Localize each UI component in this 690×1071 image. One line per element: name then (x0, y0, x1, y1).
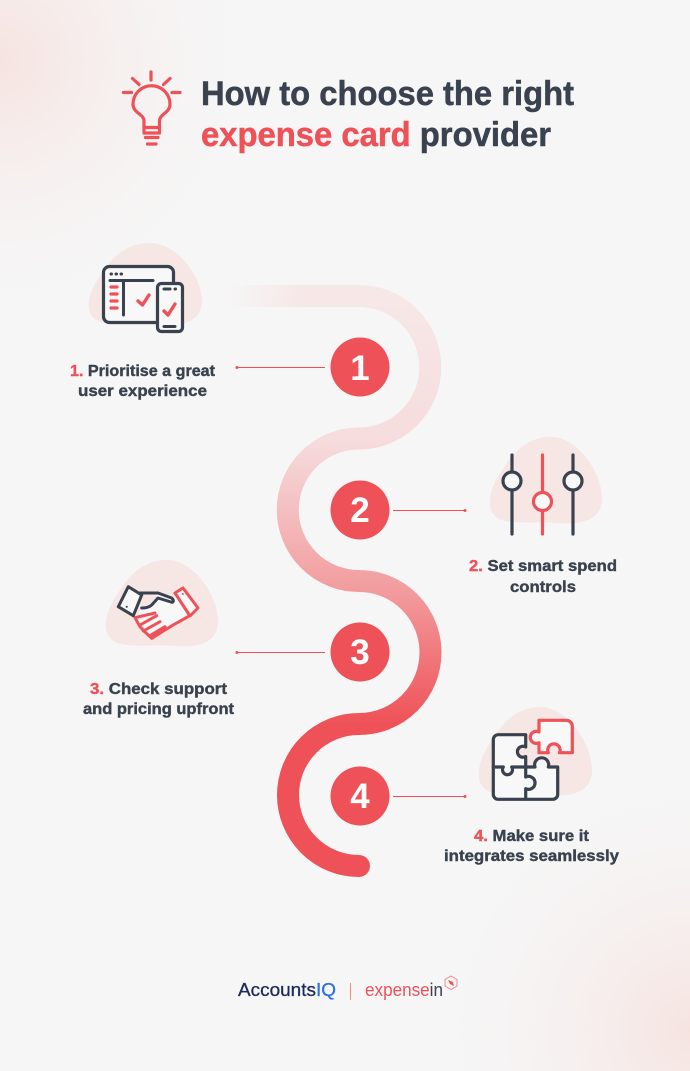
title: expense card provider (201, 116, 551, 154)
label 1 (70, 363, 216, 400)
icon: light bulb (124, 72, 180, 144)
label 4: 4. Make sure it (474, 828, 590, 845)
title (201, 75, 574, 154)
icon: handshake (118, 587, 198, 638)
step 1 marker: 1 (350, 349, 370, 388)
icon: browser and phone (104, 266, 182, 332)
logos: expensein (365, 979, 443, 1000)
icon: sliders (503, 455, 582, 534)
label 3: and pricing upfront (83, 701, 235, 718)
label 1: 1. Prioritise a great (70, 363, 216, 380)
blob 1 (89, 243, 202, 325)
connector 3 (236, 651, 325, 654)
label 3 (83, 681, 235, 718)
step 3 marker: 3 (350, 633, 370, 672)
label 2: 2. Set smart spend (469, 558, 617, 575)
step 4 marker: 4 (350, 777, 370, 816)
blob 4 (479, 707, 592, 795)
step 3 marker (330, 622, 390, 682)
logos: AccountsIQ (238, 980, 336, 1000)
label 2: controls (510, 579, 576, 596)
label 2 (469, 558, 617, 596)
connector 2 (393, 509, 466, 512)
label 3: 3. Check support (90, 681, 228, 698)
label 1: user experience (78, 383, 207, 400)
icon: puzzle (493, 720, 572, 799)
title: How to choose the right (201, 75, 574, 113)
step 2 marker (330, 480, 390, 540)
connector 1 (236, 366, 325, 369)
blob 3 (106, 560, 218, 646)
blob 2 (490, 437, 602, 523)
step 4 marker (330, 766, 390, 826)
step 2 marker: 2 (350, 491, 370, 530)
label 4: integrates seamlessly (444, 848, 619, 865)
logos (238, 976, 457, 1000)
label 4 (444, 828, 619, 865)
step 1 marker (330, 338, 390, 396)
winding road (216, 283, 430, 866)
connector 4 (393, 795, 466, 798)
